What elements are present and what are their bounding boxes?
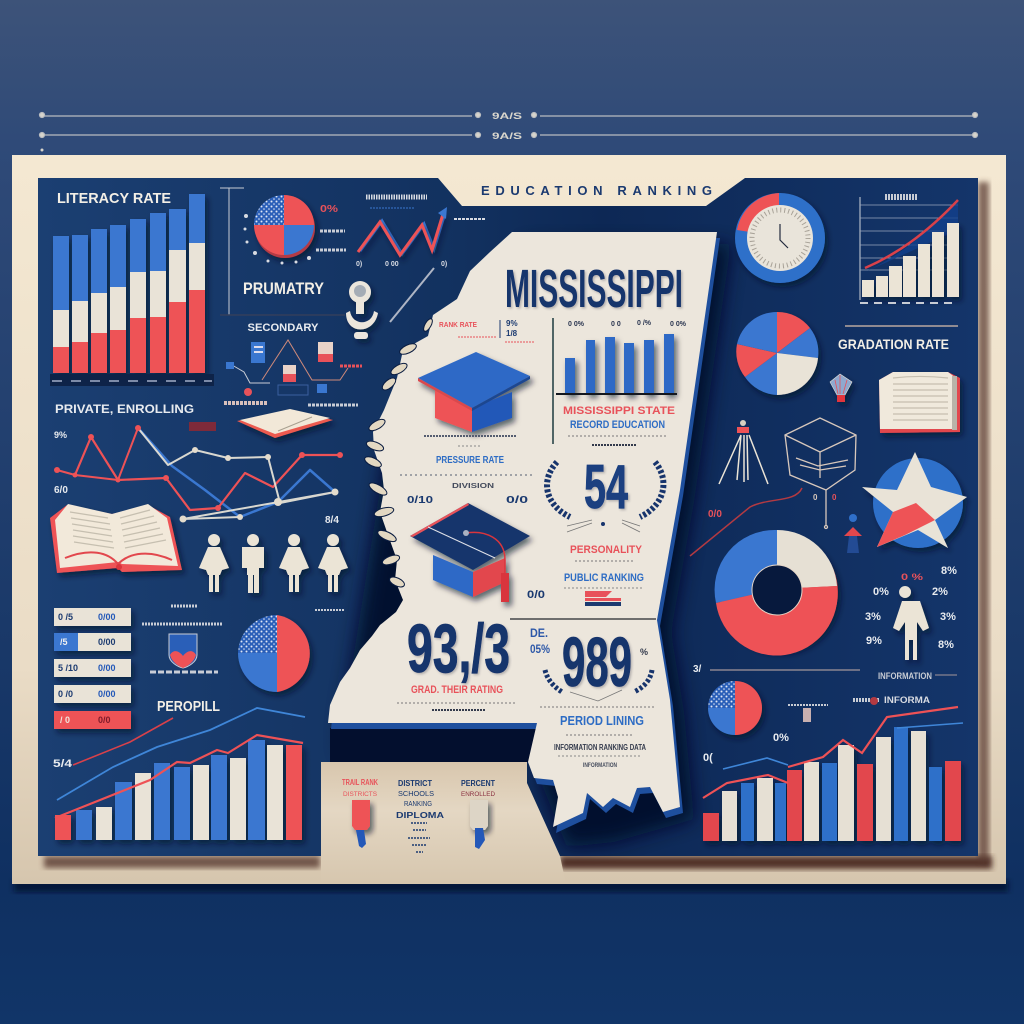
icon: star on disc <box>862 452 967 548</box>
icon: graduation cap blue <box>418 352 530 432</box>
chart: bottom-right bars <box>703 695 963 841</box>
map shadow <box>342 244 731 847</box>
icon: shuttlecock <box>830 374 852 402</box>
panel: primary: 0% <box>320 204 338 215</box>
chart: donut <box>715 530 838 656</box>
chart: zigzag arrow: 0 00 <box>385 261 399 268</box>
panel: bottom cream block: DIPLOMA <box>396 811 444 820</box>
figure with percents: 8% <box>941 565 957 577</box>
map of Mississippi <box>328 232 720 833</box>
table rows: 0/00 <box>98 612 116 622</box>
map top divider <box>510 618 656 620</box>
header rules: 9A/S <box>492 111 522 121</box>
map caption under cap: PRESSURE RATE <box>436 455 504 466</box>
icon: gauge <box>735 193 825 283</box>
cream board <box>12 155 1008 892</box>
icon: small figure <box>844 514 862 553</box>
chart: map blue bars: RECORD EDUCATION <box>570 419 665 431</box>
chart: map blue bars: 0 /% <box>637 320 652 327</box>
figure with percents: 3% <box>865 611 881 623</box>
icon: open book right <box>879 372 960 433</box>
panel: secondary: SECONDARY <box>248 322 319 334</box>
stat: 93,/3: 93,/3 <box>407 610 510 687</box>
heading: graduation rate <box>838 326 958 352</box>
panel: bottom cream block <box>321 762 566 884</box>
figure with percents: 0% <box>873 586 889 598</box>
map callout top <box>439 319 535 342</box>
table rows: 0/00 <box>98 689 116 699</box>
panel: secondary <box>226 322 362 396</box>
chart: half pie <box>238 615 310 692</box>
note: red trend line: 0/0 <box>708 509 722 520</box>
chart: bottom-right bars: 0% <box>773 732 789 744</box>
icon: tripod <box>719 420 768 484</box>
map caption under cap: 0/10 <box>407 495 434 506</box>
stat: 93,/3 <box>397 610 517 710</box>
chart: bottom-left bars <box>53 708 305 840</box>
heading: graduation rate: GRADATION RATE <box>838 336 949 352</box>
chart: multi-line <box>54 425 343 522</box>
chart: map blue bars: 0 0 <box>611 321 621 328</box>
note: red trend line <box>690 488 837 556</box>
icon: graduation cap navy <box>410 503 530 602</box>
map lower shadow band <box>330 728 538 762</box>
figure with percents <box>865 565 957 660</box>
table rows: / 0 <box>60 715 70 725</box>
note: red trend line: 0 <box>813 493 818 502</box>
icon: cap outline <box>785 418 856 528</box>
figure with percents: 8% <box>938 639 954 651</box>
divider with label: INFORMATION <box>878 671 932 681</box>
figure with percents: 0 % <box>901 572 923 582</box>
heading: literacy rate: LITERACY RATE <box>57 190 171 207</box>
map callout top: 9% <box>506 319 518 328</box>
divider with label <box>693 664 957 681</box>
stat: 989 with laurel: INFORMATION RANKING DATA <box>554 743 646 752</box>
figure with percents: 2% <box>932 586 948 598</box>
heading: per pupil: PEROPILL <box>157 698 220 715</box>
header rules <box>40 111 978 152</box>
table rows: 0/00 <box>98 637 116 647</box>
map caption under cap: 0/0 <box>506 495 529 506</box>
note labels <box>54 403 358 526</box>
stat: 989 with laurel: % <box>640 647 648 657</box>
panel: bottom cream block: DISTRICT <box>398 779 432 788</box>
heading: education ranking: EDUCATION RANKING <box>481 183 712 198</box>
diagonal pointer <box>390 268 434 322</box>
figure with percents: 9% <box>866 635 882 647</box>
stat: 989 with laurel: DE. <box>530 626 548 640</box>
chart: map blue bars: 0 0% <box>568 321 585 328</box>
map caption under cap: DIVISION <box>452 483 494 490</box>
map callout top: RANK RATE <box>439 322 477 329</box>
stat: 989 with laurel: INFORMATION <box>583 763 617 769</box>
panel: bottom cream block: DISTRICTS <box>343 792 377 798</box>
table rows <box>54 608 131 729</box>
map callout top: 1/8 <box>506 329 518 338</box>
table rows: 0 /5 <box>58 612 73 622</box>
note labels: 9% <box>54 430 67 440</box>
stat: 989 with laurel <box>530 623 655 769</box>
panel: bottom cream block: TRAIL RANK <box>342 778 378 787</box>
chart: small half pie <box>708 681 762 735</box>
chart: zigzag arrow <box>356 197 486 268</box>
panel: bottom cream block: RANKING <box>404 801 432 808</box>
chart: map blue bars: 0 0% <box>670 321 687 328</box>
note: red trend line: 0 <box>832 493 837 502</box>
note labels: 8/4 <box>325 515 339 526</box>
stat: 989 with laurel: PERIOD LINING <box>560 713 644 728</box>
map caption under cap <box>400 436 535 506</box>
chart: zigzag arrow: 0) <box>356 261 362 268</box>
chart: bottom-right bars: INFORMA <box>884 695 931 705</box>
title: Mississippi: MISSISSIPPI <box>505 259 683 319</box>
panel: bottom cream block: ENROLLED <box>461 792 496 798</box>
table rows: 0 /0 <box>58 689 73 699</box>
icon: light bulb <box>346 281 378 339</box>
chart: stacked bars <box>53 194 205 373</box>
icon: people <box>199 534 348 593</box>
pie note <box>315 609 345 611</box>
stat: 989 with laurel: 989 <box>562 623 632 701</box>
note labels: 6/0 <box>54 485 68 496</box>
stat: 54 with laurel: PUBLIC RANKING <box>564 572 644 584</box>
stat: 54 with laurel: PERSONALITY <box>570 544 643 556</box>
header rules: 9A/S <box>492 131 522 141</box>
chart: bottom-right bars: 0( <box>703 752 713 764</box>
table rows: 5 /10 <box>58 663 78 673</box>
small stat: 0/0 <box>527 589 545 601</box>
icon: open flat book <box>237 409 333 438</box>
heading: private enrolling: PRIVATE, ENROLLING <box>55 402 194 416</box>
table rows: 0/0 <box>98 715 111 725</box>
stat: 989 with laurel: 05% <box>530 642 550 656</box>
shield callout <box>142 606 223 672</box>
chart: map blue bars: MISSISSIPPI STATE <box>563 405 675 417</box>
figure with percents: 3% <box>940 611 956 623</box>
stat: 54 with laurel <box>547 453 663 606</box>
chart: map blue bars <box>553 318 687 445</box>
stat: 54 with laurel: 54 <box>584 453 628 522</box>
panel: primary <box>220 188 346 315</box>
navy panel <box>38 178 992 869</box>
divider with label: 3/ <box>693 664 702 675</box>
chart: bottom-left bars: 5/4 <box>53 758 73 770</box>
panel: bottom cream block: PERCENT <box>461 779 495 788</box>
chart: graduation bars <box>860 197 959 303</box>
panel: literacy rate <box>50 190 214 386</box>
chart: six-slice pie <box>736 312 818 395</box>
table rows: 0/00 <box>98 663 116 673</box>
heading: primary: PRUMATRY <box>243 279 325 298</box>
chart: zigzag arrow: 0) <box>441 261 447 268</box>
chart: quartered pie <box>254 195 315 258</box>
panel: bottom cream block: SCHOOLS <box>398 791 434 798</box>
icon: open book left <box>50 504 182 573</box>
stat: 93,/3: GRAD. THEIR RATING <box>411 684 503 696</box>
table rows: /5 <box>60 637 68 647</box>
